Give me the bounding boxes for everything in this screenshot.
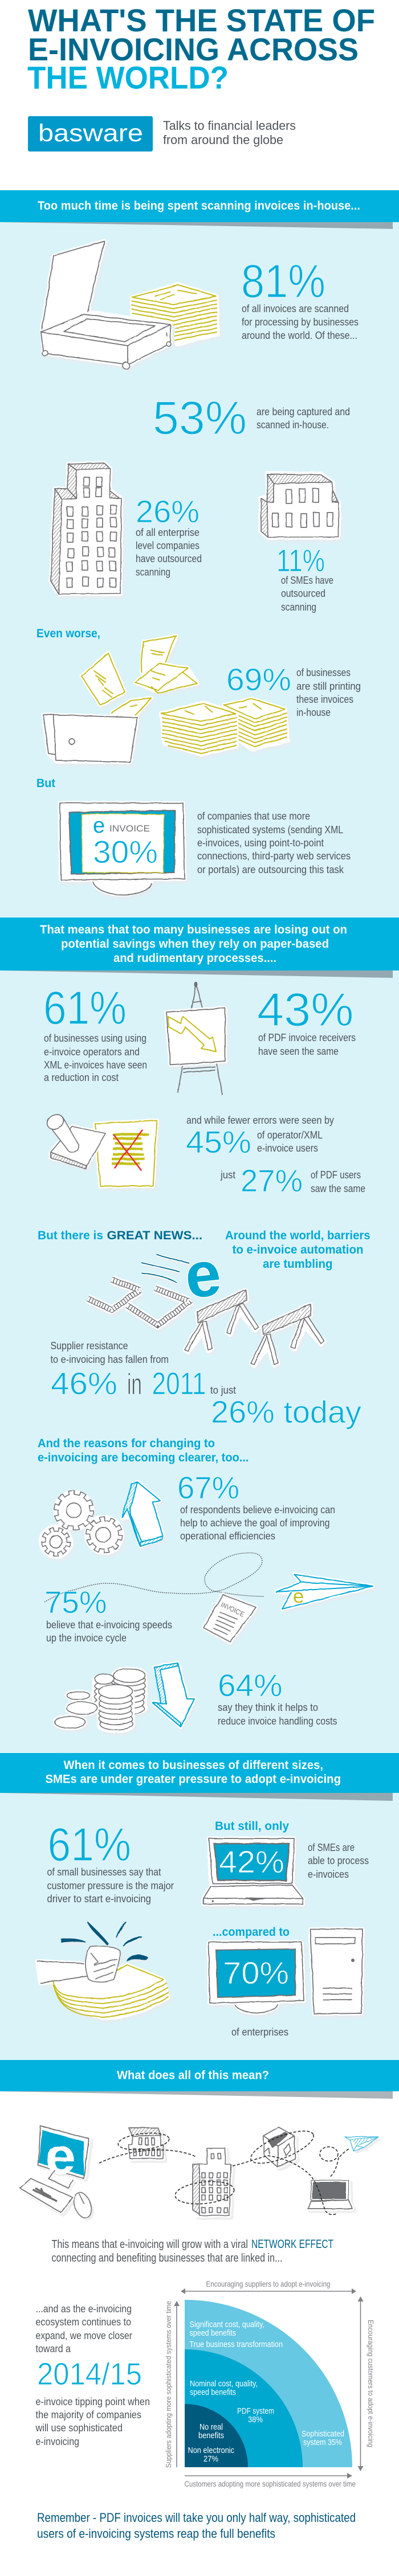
icon: enterprise building (51, 463, 121, 594)
axis label: suppliers left: Suppliers adopting more sophisticated systems over time (164, 2301, 173, 2468)
stat: 81% scanned: for processing by businesses (242, 317, 359, 328)
text: sophisticated systems: sophisticated systems (sending XML (197, 824, 343, 836)
stat: 43% PDF receivers: have seen the same (258, 1046, 339, 1057)
stat: 64% handling costs (218, 1668, 337, 1727)
icon: paper stack (132, 284, 218, 344)
intro text: from around the globe (163, 133, 283, 147)
icon: desktop monitor with 70% (209, 1942, 304, 2013)
heading: great news (38, 1229, 202, 1242)
banner: too much time (0, 190, 399, 229)
stat: 2014/15 tipping point: will use sophisticated (35, 2422, 123, 2434)
stat: 61% cost reduction (43, 981, 147, 1083)
text: network effect (51, 2238, 333, 2264)
heading: barriers tumbling (225, 1229, 370, 1271)
icon: easel with falling chart (166, 982, 225, 1095)
icon: dashed flight path (44, 1553, 264, 1602)
stat: 61% customer pressure: of small businesses say that (47, 1866, 161, 1878)
stat: 26% enterprise: have outsourced (136, 553, 202, 564)
panel: scanning in-house (0, 190, 399, 895)
panel: potential savings (0, 918, 399, 1731)
title: E-INVOICING ACROSS (28, 31, 359, 67)
stat: 53% in-house (153, 391, 350, 444)
text: SMEs able to process (308, 1842, 369, 1880)
panel: what does it mean (0, 2060, 399, 2541)
heading: great news: GREAT NEWS... (107, 1229, 202, 1242)
icon: small SME building (128, 2128, 164, 2159)
stat: 11% SMEs: of SMEs have (281, 575, 333, 586)
icon: monitor with e-invoice 30% (60, 803, 185, 895)
icon: SME building (260, 473, 339, 538)
text: supplier resistance stats: to just (210, 1385, 236, 1396)
stat: 61% customer pressure: customer pressure is the major (47, 1880, 174, 1891)
segment labels: Nominal cost, quality, (190, 2379, 258, 2389)
banner: what does all of this mean (0, 2060, 399, 2099)
icon: desktop computer (20, 2126, 95, 2220)
segment labels: PDF system (237, 2406, 274, 2416)
icon: paper plane (276, 1574, 373, 1609)
stat: 45% and 27% fewer errors: just (220, 1169, 235, 1181)
stat: 45% and 27% fewer errors: 45% (186, 1124, 251, 1160)
icon: monitor with e-invoice 30%: 30% (93, 834, 158, 870)
text: sophisticated systems (197, 810, 351, 875)
heading: but still only: But still, only (215, 1820, 289, 1833)
stat: 26% enterprise: of all enterprise (136, 527, 199, 538)
arrow: suppliers horizontal (181, 2288, 356, 2294)
stat: 2014/15 tipping point: e-invoicing (35, 2436, 79, 2447)
stat: 11% SMEs: outsourced (281, 588, 325, 599)
stat: 53% in-house: are being captured and (256, 406, 350, 417)
icon: gears (39, 1490, 124, 1559)
stat: 26% enterprise (136, 494, 202, 578)
text: supplier resistance stats: 2011 (152, 1366, 206, 1401)
stat: 2014/15 tipping point: e-invoice tipping point when (35, 2396, 150, 2407)
icon: desktop computer: e (45, 2128, 76, 2184)
chart: adoption quadrant (164, 2279, 375, 2488)
stat: 67% operational efficiencies: operational efficiencies (180, 1530, 275, 1542)
banner: losing out on savings: and rudimentary processes.... (113, 952, 276, 965)
arrow: customers vertical (358, 2296, 364, 2471)
stat: 69% printing: these invoices (296, 694, 353, 705)
network diagram (20, 2124, 378, 2220)
text: supplier resistance stats: Supplier resistance (50, 1340, 128, 1352)
title (27, 2, 375, 96)
segment: sophisticated (185, 2300, 352, 2467)
stat: 11% SMEs: 11% (276, 543, 325, 578)
laptop body (203, 1838, 303, 1904)
stat: 69% printing: are still printing (296, 681, 361, 692)
text: network effect: NETWORK EFFECT (251, 2238, 333, 2251)
icon: e smashing barriers (88, 1237, 324, 1366)
stat: 61% cost reduction: 61% (43, 981, 127, 1034)
heading: compared to: ...compared to (213, 1926, 290, 1939)
stat: 45% and 27% fewer errors: of PDF users (311, 1169, 361, 1181)
banner: businesses of different sizes: SMEs are under greater pressure to adopt e-invoicing (46, 1772, 341, 1786)
stat: 2014/15 tipping point: ecosystem continues to (35, 2316, 131, 2328)
banner: losing out on savings: That means that too many businesses are losing out on (40, 923, 347, 936)
text: sophisticated systems: of companies that use more (197, 810, 310, 822)
icon: laptop with 42% (203, 1838, 303, 1904)
stat: 75% speeds cycle: 75% (44, 1584, 107, 1620)
stat: 67% operational efficiencies (177, 1470, 335, 1542)
segment labels: speed benefits (189, 2328, 236, 2338)
icon: small paper plane (345, 2137, 378, 2151)
segment labels: 38% (248, 2415, 263, 2425)
dashed network connections (99, 2124, 349, 2214)
stat: 67% operational efficiencies: help to achieve the goal of improving (180, 1517, 329, 1529)
stat: 2014/15 tipping point: the majority of companies (35, 2409, 141, 2421)
segment labels: Non electronic (188, 2446, 234, 2455)
stat: 43% PDF receivers (257, 983, 356, 1057)
text: of enterprises: of enterprises (231, 2026, 288, 2038)
axis label: customers right: Encouraging customers to adopt e-invoicing (367, 2320, 375, 2447)
arrow: suppliers vertical (174, 2301, 180, 2467)
text: supplier resistance stats: to e-invoicing has fallen from (50, 1354, 169, 1365)
stat: 26% enterprise: 26% (136, 494, 199, 529)
stat: 81% scanned (241, 255, 359, 341)
text: SMEs able to process: able to process (308, 1855, 369, 1866)
arrow: customers horizontal (185, 2473, 352, 2479)
banner: what does all of this mean: What does all of this mean? (117, 2069, 269, 2082)
segment: PDF system (185, 2349, 303, 2467)
segment labels (188, 2320, 344, 2464)
icon: parcel box (263, 2127, 295, 2167)
stat: 2014/15 tipping point (35, 2303, 150, 2447)
panel: SME pressure (0, 1753, 399, 2038)
text: network effect: This means that e-invoicing will grow with a viral (51, 2238, 248, 2251)
stat: 26% enterprise: scanning (136, 566, 170, 578)
heading: barriers tumbling: Around the world, barriers (225, 1229, 370, 1242)
stat: 75% speeds cycle (44, 1584, 172, 1644)
upright barriers (185, 1290, 324, 1366)
segment labels: Significant cost, quality, (189, 2320, 264, 2329)
segment labels: 27% (203, 2454, 218, 2464)
stat: 75% speeds cycle: believe that e-invoicing speeds (46, 1619, 172, 1631)
monitor body (60, 803, 185, 895)
segment labels: benefits (198, 2431, 224, 2440)
burst lines (62, 1922, 148, 1960)
closing note: users of e-invoicing systems reap the full benefits (37, 2526, 275, 2541)
stat: 53% in-house: 53% (153, 391, 247, 444)
heading: reasons for changing: And the reasons for changing to (38, 1437, 215, 1450)
stat: 81% scanned: of all invoices are scanned (242, 303, 349, 314)
text: supplier resistance stats (50, 1340, 361, 1430)
stat: 11% SMEs (276, 543, 333, 613)
icon: paper plane: e (293, 1586, 304, 1607)
icon: invoice sheet (203, 1595, 256, 1642)
stat: 45% and 27% fewer errors: 27% (241, 1163, 303, 1198)
heading: reasons for changing (38, 1437, 249, 1464)
heading: great news: But there is (38, 1229, 103, 1242)
stat: 2014/15 tipping point: expand, we move closer (35, 2330, 132, 2341)
stat: 81% scanned: 81% (241, 255, 325, 308)
closing note (37, 2511, 356, 2541)
intro text: Talks to financial leaders (163, 118, 296, 133)
stat: 69% printing (226, 662, 361, 718)
stat: 64% handling costs: reduce invoice handling costs (218, 1715, 337, 1727)
banner: losing out on savings: potential savings when they rely on paper-based (61, 937, 329, 951)
heading: reasons for changing: e-invoicing are becoming clearer, too... (38, 1451, 249, 1464)
stat: 61% cost reduction: e-invoice operators and (44, 1046, 140, 1058)
stat: 2014/15 tipping point: toward a (35, 2343, 71, 2354)
icon: desktop monitor with 70%: 70% (223, 1955, 289, 1991)
icon: flatbed scanner (41, 241, 171, 369)
segment labels: Sophisticated (302, 2429, 344, 2439)
stat: 61% cost reduction: XML e-invoices have seen (44, 1059, 147, 1071)
text: network effect: connecting and benefiting businesses that are linked in... (51, 2252, 283, 2264)
segment labels: No real (199, 2422, 223, 2432)
icon: printed invoice stacks (161, 699, 288, 755)
icon: monitor with e-invoice 30%: e (93, 814, 105, 838)
stat: 43% PDF receivers: of PDF invoice receivers (258, 1032, 356, 1043)
stat: 61% customer pressure (47, 1818, 174, 1905)
text: sophisticated systems: or portals) are outsourcing this task (197, 864, 344, 875)
icon: monitor with e-invoice 30%: INVOICE (109, 824, 150, 834)
icon: fist squeezing papers (37, 1922, 168, 2018)
stat: 64% handling costs: say they think it helps to (218, 1702, 318, 1713)
stat: 69% printing: of businesses (296, 667, 351, 678)
stat: 67% operational efficiencies: 67% (177, 1470, 239, 1505)
segment labels: system 35% (303, 2438, 342, 2447)
icon: computer tower (310, 1929, 363, 2014)
heading: but: But (36, 777, 55, 790)
stat: 69% printing: in-house (296, 707, 331, 718)
segment: non electronic (185, 2404, 248, 2467)
text: SMEs able to process: e-invoices (308, 1869, 349, 1880)
text: sophisticated systems: e-invoices, using point-to-point (197, 837, 324, 849)
stat: 2014/15 tipping point: 2014/15 (37, 2356, 142, 2391)
text: SMEs able to process: of SMEs are (308, 1842, 355, 1853)
stat: 61% customer pressure: 61% (48, 1818, 131, 1871)
stat: 45% and 27% fewer errors: e-invoice users (257, 1142, 318, 1154)
stat: 43% PDF receivers: 43% (257, 983, 353, 1036)
speed lines (141, 1255, 189, 1283)
text: supplier resistance stats: 46% (51, 1366, 117, 1401)
axis label: customers bottom: Customers adopting more sophisticated systems over time (185, 2479, 356, 2488)
stat: 61% cost reduction: a reduction in cost (44, 1072, 119, 1083)
stat: 61% customer pressure: driver to start e-invoicing (47, 1893, 151, 1905)
icon: down arrow (153, 1663, 194, 1727)
icon: invoice sheet: INVOICE (219, 1600, 246, 1618)
banner: businesses of different sizes: When it comes to businesses of different sizes, (64, 1759, 323, 1772)
stat: 61% cost reduction: of businesses using using (44, 1033, 146, 1044)
icon: printer with flying sheets (43, 636, 197, 762)
basware logo: basware (38, 120, 143, 147)
fallen barriers (88, 1280, 191, 1325)
stat: 11% SMEs: scanning (281, 601, 316, 613)
heading: even worse: Even worse, (36, 627, 100, 640)
stat: 53% in-house: scanned in-house. (256, 419, 329, 431)
stat: 2014/15 tipping point: ...and as the e-invoicing (35, 2303, 132, 2315)
stat: 67% operational efficiencies: of respondents believe e-invoicing can (180, 1504, 335, 1516)
text: supplier resistance stats: 26% today (211, 1394, 361, 1430)
stat: 64% handling costs: 64% (218, 1668, 283, 1703)
stat: 75% speeds cycle: up the invoice cycle (46, 1632, 127, 1644)
icon: laptop with 42%: 42% (219, 1844, 284, 1879)
monitor body (209, 1942, 304, 2013)
icon: e smashing barriers: e (181, 1237, 224, 1312)
icon: up arrow (122, 1482, 163, 1546)
icon: coin stacks (55, 1669, 145, 1731)
basware logo (28, 116, 153, 151)
icon: small laptop (308, 2180, 352, 2209)
stat: 69% printing: 69% (226, 662, 291, 697)
title: THE WORLD? (27, 59, 229, 96)
stat: 81% scanned: around the world. Of these... (242, 330, 357, 341)
title: WHAT'S THE STATE OF (28, 2, 375, 38)
stat: 45% and 27% fewer errors: and while fewer errors were seen by (186, 1115, 334, 1126)
text: supplier resistance stats: in (127, 1368, 142, 1401)
stat: 45% and 27% fewer errors: of operator/XML (257, 1129, 323, 1141)
icon: stamp and crossed document (44, 1112, 157, 1186)
papers and hand (37, 1946, 168, 2018)
banner: losing out on savings (0, 918, 399, 978)
banner: too much time: Too much time is being spent scanning invoices in-house... (38, 199, 360, 212)
axis label: suppliers top: Encouraging suppliers to adopt e-invoicing (206, 2279, 331, 2288)
icon: tall enterprise building (192, 2148, 231, 2215)
stat: 45% and 27% fewer errors: saw the same (311, 1183, 365, 1194)
text: sophisticated systems: connections, third-party web services (197, 850, 351, 862)
stat: 45% and 27% fewer errors (186, 1115, 365, 1198)
segment labels: True business transformation (189, 2340, 283, 2349)
heading: barriers tumbling: are tumbling (263, 1258, 333, 1271)
banner: businesses of different sizes (0, 1753, 399, 1801)
intro text (163, 118, 296, 147)
heading: barriers tumbling: to e-invoice automation (233, 1243, 364, 1256)
segment labels: speed benefits (190, 2387, 236, 2397)
stat: 26% enterprise: level companies (136, 540, 199, 551)
